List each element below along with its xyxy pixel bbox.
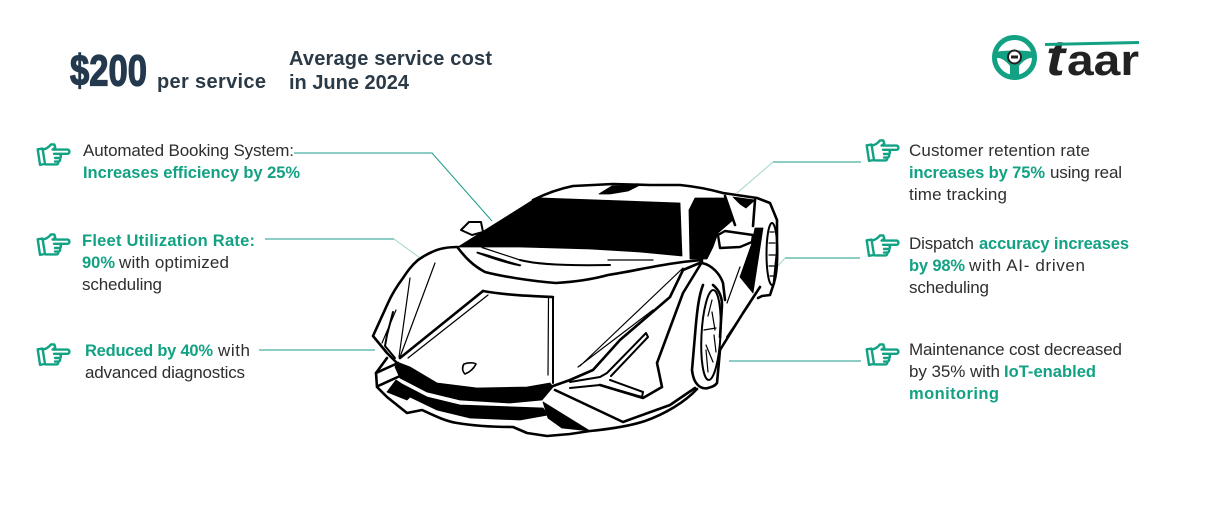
front wheel bbox=[692, 285, 723, 388]
car body outline bbox=[373, 184, 777, 436]
callout: retention bbox=[867, 140, 1122, 204]
average service cost caption: in June 2024 bbox=[289, 72, 410, 94]
maintenance text: monitoring bbox=[909, 385, 999, 403]
icon: pointing hand bbox=[38, 144, 69, 165]
header: average service cost bbox=[70, 46, 492, 96]
retention text: increases by 75% bbox=[909, 164, 1045, 182]
callout: dispatch bbox=[867, 234, 1129, 297]
diagnostics text: Reduced by 40% bbox=[85, 342, 213, 360]
dispatch text: Dispatch bbox=[909, 234, 974, 253]
booking text: Automated Booking System: bbox=[83, 141, 294, 160]
dispatch text bbox=[909, 234, 1129, 297]
car illustration bbox=[373, 184, 778, 436]
booking text: Increases efficiency by 25% bbox=[83, 164, 300, 182]
door pillar bbox=[725, 196, 755, 226]
fleet text: with optimized bbox=[118, 253, 229, 272]
rear side intake bbox=[740, 228, 763, 293]
logo t: t bbox=[1046, 30, 1068, 86]
fleet text: Fleet Utilization Rate: bbox=[82, 232, 255, 250]
icon: steering wheel bbox=[994, 38, 1034, 78]
fleet text: scheduling bbox=[82, 275, 162, 294]
maintenance text: Maintenance cost decreased bbox=[909, 340, 1122, 359]
icon: pointing hand bbox=[867, 344, 898, 365]
dispatch text: with AI- driven bbox=[968, 256, 1085, 275]
callout: automated booking bbox=[38, 141, 300, 182]
retention text: using real bbox=[1050, 163, 1122, 182]
retention text: Customer retention rate bbox=[909, 141, 1090, 160]
retention text: time tracking bbox=[909, 185, 1007, 204]
right mirror bbox=[718, 231, 753, 248]
icon: pointing hand bbox=[867, 140, 898, 161]
icon: pointing hand bbox=[38, 234, 69, 255]
hood crease under windshield bbox=[458, 248, 702, 283]
panel: left callouts bbox=[38, 141, 300, 382]
connector lines bbox=[259, 153, 861, 361]
callout: fleet utilization bbox=[38, 232, 255, 294]
callout: maintenance bbox=[867, 340, 1122, 403]
maintenance text bbox=[909, 340, 1122, 403]
badge bbox=[463, 363, 476, 374]
side mirror left bbox=[461, 222, 483, 235]
dispatch text: scheduling bbox=[909, 278, 989, 297]
fleet text: 90% bbox=[82, 254, 115, 272]
side sill lines bbox=[702, 263, 725, 300]
diagnostics text bbox=[85, 341, 250, 382]
hood panel lines bbox=[400, 291, 483, 358]
big price: $200 bbox=[70, 46, 147, 96]
logo aar: aar bbox=[1067, 36, 1139, 85]
fleet text bbox=[82, 232, 255, 294]
dispatch text: accuracy increases bbox=[979, 235, 1129, 253]
average service cost caption bbox=[289, 48, 492, 94]
logo bar bbox=[1045, 42, 1139, 44]
retention text bbox=[909, 141, 1122, 204]
roof scoop bbox=[599, 185, 640, 194]
booking text bbox=[83, 141, 300, 182]
front bumper upper band bbox=[395, 362, 553, 403]
average service cost caption: Average service cost bbox=[289, 48, 492, 70]
panel: right callouts bbox=[867, 140, 1129, 403]
diagnostics text: with bbox=[217, 341, 250, 360]
front splitter bbox=[376, 363, 400, 386]
dispatch text: by 98% bbox=[909, 257, 965, 275]
maintenance text: IoT-enabled bbox=[1004, 363, 1096, 381]
windshield bbox=[458, 198, 682, 256]
diagnostics text: advanced diagnostics bbox=[85, 363, 245, 382]
callout: diagnostics bbox=[38, 341, 250, 382]
logo: taar bbox=[994, 30, 1139, 86]
side air vent bbox=[570, 333, 648, 382]
right side hood line bbox=[553, 262, 702, 386]
maintenance text: by 35% with bbox=[909, 362, 1000, 381]
icon: pointing hand bbox=[38, 344, 69, 365]
per service label: per service bbox=[157, 71, 266, 93]
rear wheel bbox=[766, 223, 778, 285]
side window bbox=[689, 198, 733, 259]
front bumper lower band bbox=[387, 380, 548, 420]
icon: pointing hand bbox=[867, 235, 898, 256]
